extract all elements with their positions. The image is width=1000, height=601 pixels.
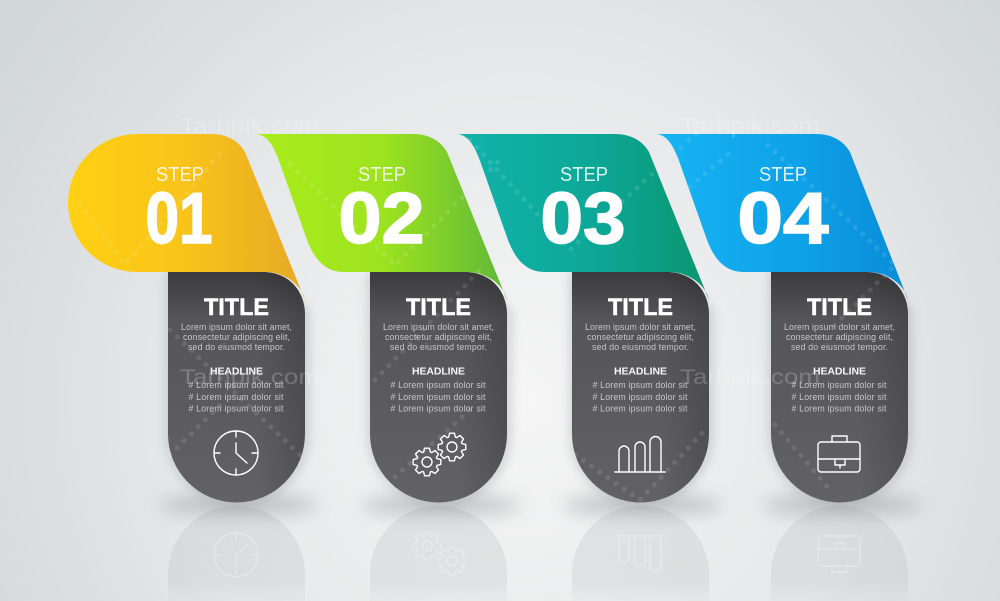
text block 2 [383, 294, 494, 414]
text block 3: # Lorem ipsum dolor sit [592, 380, 688, 390]
step label 3: STEP [560, 164, 608, 186]
text block 4: # Lorem ipsum dolor sit [792, 404, 887, 414]
text block 3: consectetur adipiscing elit, [587, 332, 694, 342]
text block 4: TITLE [807, 294, 872, 321]
body shadow 2 [367, 272, 512, 506]
step label 4: STEP [759, 164, 807, 186]
step 4 card [657, 134, 922, 601]
icon: clock [214, 431, 258, 475]
text block 1: # Lorem ipsum dolor sit [188, 380, 284, 390]
flag 1 yellow [68, 134, 305, 300]
text block 3: TITLE [608, 294, 673, 321]
text block 2: # Lorem ipsum dolor sit [390, 380, 486, 390]
ground shadow 2 [361, 496, 521, 514]
text block 1: TITLE [204, 294, 269, 321]
watermark text: Tarhpik.com [680, 115, 820, 138]
step 2 card [257, 134, 521, 601]
reflection 4 [771, 506, 908, 601]
text block 3: Lorem ipsum dolor sit amet, [585, 322, 696, 332]
text block 2: Lorem ipsum dolor sit amet, [383, 322, 494, 332]
icon: bar arches [615, 437, 665, 472]
text block 3: # Lorem ipsum dolor sit [592, 392, 688, 402]
text block 2: consectetur adipiscing elit, [385, 332, 492, 342]
ground shadow 3 [563, 496, 723, 514]
step label 1: STEP [156, 164, 204, 186]
step number 2: 02 [338, 179, 424, 259]
text block 2: TITLE [406, 294, 471, 321]
watermark text: Tarhpik.com [180, 115, 320, 138]
ground shadow 1 [159, 496, 319, 514]
reflection 2 [370, 506, 507, 601]
icon: gears [413, 433, 466, 476]
body shadow 4 [768, 272, 913, 506]
text block 4: HEADLINE [813, 366, 866, 378]
text block 4: sed do eiusmod tempor. [791, 342, 888, 352]
text block 1: HEADLINE [210, 366, 263, 378]
dark body 3 [572, 272, 709, 502]
step 1 card [68, 134, 319, 601]
flag 3 teal [458, 134, 709, 300]
ground shadow 4 [762, 496, 922, 514]
dark body 2 [370, 272, 507, 502]
body shadow 1 [165, 272, 310, 506]
text block 3: HEADLINE [614, 366, 667, 378]
watermark text: Tarhpik.com [680, 366, 820, 389]
text block 4: Lorem ipsum dolor sit amet, [784, 322, 895, 332]
text block 4: consectetur adipiscing elit, [786, 332, 893, 342]
watermark text: Tarhpik.com [180, 366, 320, 389]
text block 1: consectetur adipiscing elit, [183, 332, 290, 342]
text block 2: sed do eiusmod tempor. [390, 342, 487, 352]
text block 1: # Lorem ipsum dolor sit [188, 404, 284, 414]
step label 2: STEP [358, 164, 406, 186]
flag 2 green [257, 134, 507, 300]
step number 1: 01 [146, 179, 212, 259]
reflection 3 [572, 506, 709, 601]
step number 3: 03 [541, 179, 625, 259]
flag 4 blue [657, 134, 908, 300]
text block 4 [784, 294, 895, 414]
reflection 1 [168, 506, 305, 601]
dark body 4 [771, 272, 908, 502]
dark body 1 [168, 272, 305, 502]
text block 2: HEADLINE [412, 366, 465, 378]
text block 1: Lorem ipsum dolor sit amet, [181, 322, 292, 332]
step 3 card [458, 134, 723, 601]
watermark dots [80, 130, 895, 500]
text block 1: # Lorem ipsum dolor sit [188, 392, 284, 402]
text block 3: sed do eiusmod tempor. [592, 342, 689, 352]
step number 4: 04 [738, 179, 828, 259]
icon: briefcase [818, 436, 860, 472]
text block 4: # Lorem ipsum dolor sit [792, 380, 887, 390]
body shadow 3 [569, 272, 714, 506]
text block 2: # Lorem ipsum dolor sit [390, 392, 486, 402]
text block 2: # Lorem ipsum dolor sit [390, 404, 486, 414]
text block 3 [585, 294, 696, 414]
text block 1: sed do eiusmod tempor. [188, 342, 285, 352]
text block 4: # Lorem ipsum dolor sit [792, 392, 887, 402]
text block 3: # Lorem ipsum dolor sit [592, 404, 688, 414]
text block 1 [181, 294, 292, 414]
watermark text [180, 115, 820, 389]
